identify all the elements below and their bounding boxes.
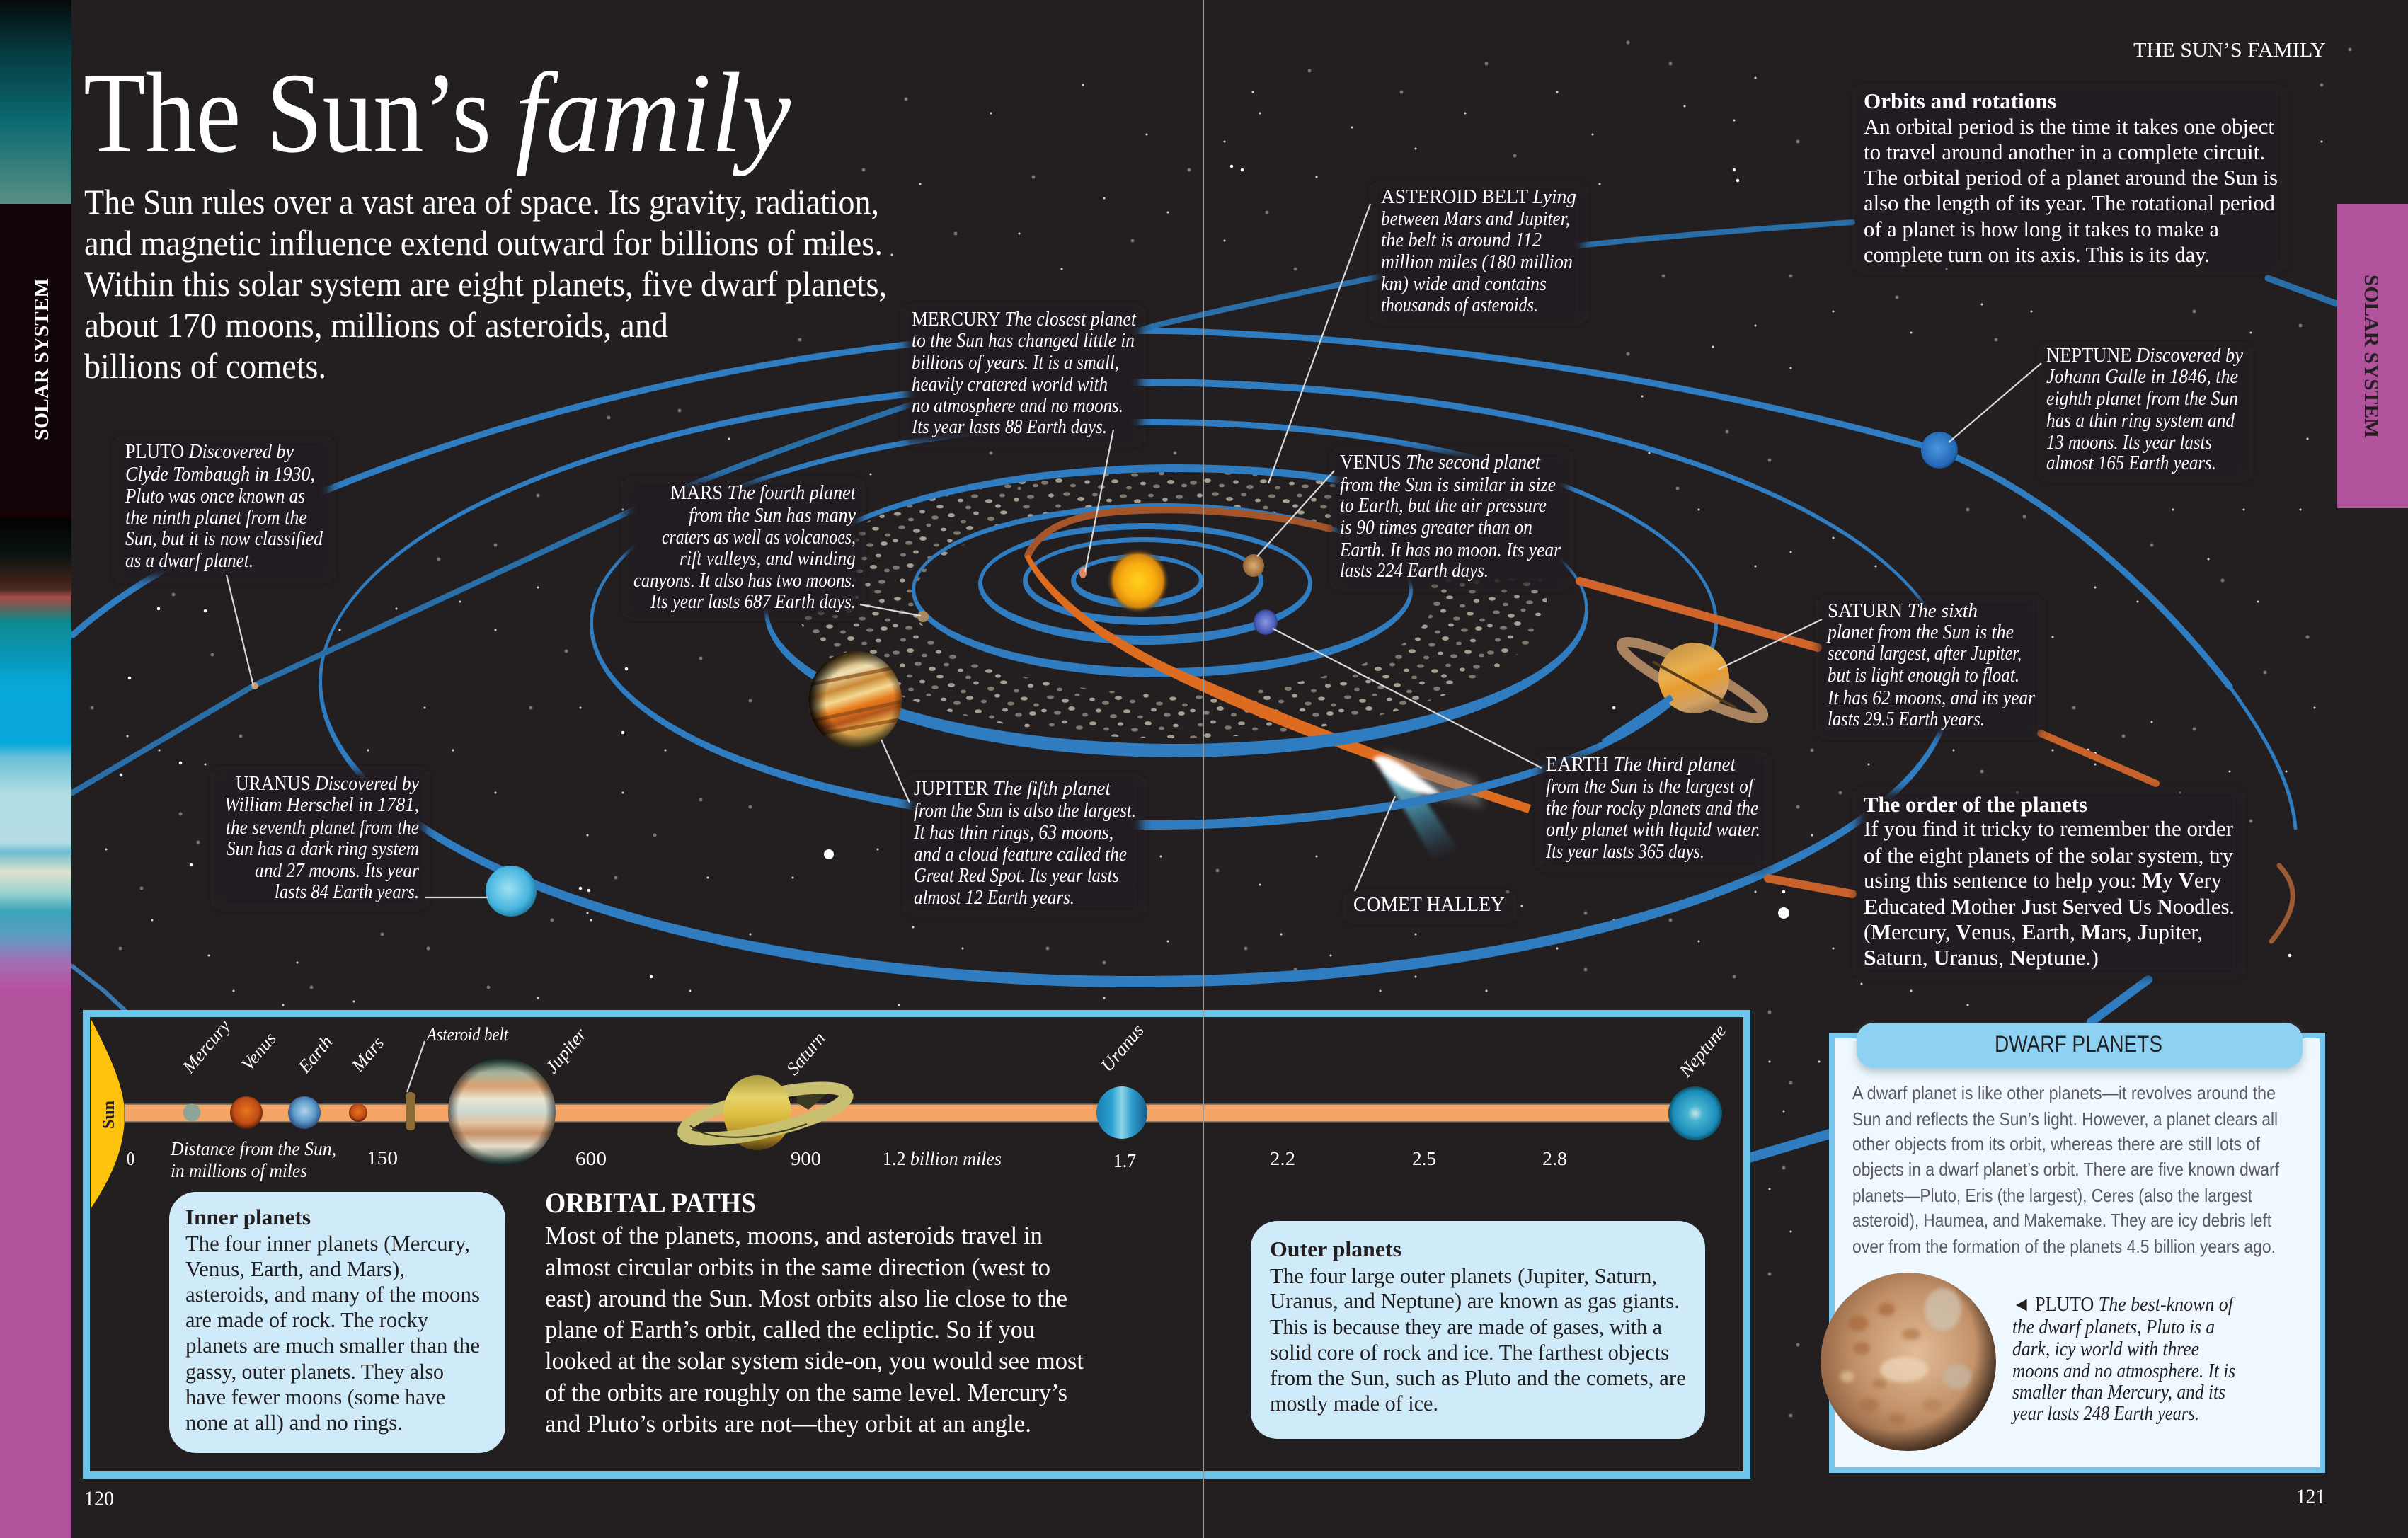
planet: Earth <box>1254 609 1278 635</box>
planet: Neptune <box>1921 432 1958 469</box>
label: Saturn: lasts 29.5 Earth years. <box>1828 708 1985 730</box>
scale: asteroid leader <box>407 1041 425 1092</box>
box: outer planets: from the Sun, such as Pluto and the comets, are <box>1270 1365 1686 1390</box>
label: Venus: VENUS The second planet <box>1340 452 1541 474</box>
label: Jupiter <box>913 778 1136 909</box>
text block: orbits and rotations: to travel around another in a complete circuit. <box>1864 139 2265 164</box>
text block: orbital paths: ORBITAL PATHS <box>545 1187 756 1219</box>
orbit: Pluto, tilted, orange and brown stretches <box>1025 510 1531 813</box>
label: Mercury: MERCURY The closest planet <box>912 309 1137 331</box>
label: Uranus: URANUS Discovered by <box>236 773 420 795</box>
scale: distance labels <box>127 1138 1567 1181</box>
intro text <box>84 182 887 386</box>
label: Earth: the four rocky planets and the <box>1546 798 1758 820</box>
text block: orbital paths: of the orbits are roughly on the same level. Mercury’s <box>545 1379 1067 1406</box>
label: Asteroid belt: the belt is around 112 <box>1381 229 1542 251</box>
label: Jupiter: JUPITER The fifth planet <box>914 778 1111 800</box>
text block: orbital paths: almost circular orbits in the same direction (west to <box>545 1253 1050 1281</box>
label: Saturn: It has 62 moons, and its year <box>1827 687 2035 709</box>
text block: orbital paths: east) around the Sun. Most orbits also lie close to the <box>545 1285 1067 1312</box>
label: Earth: from the Sun is the largest of <box>1546 776 1755 798</box>
label: Uranus: Sun has a dark ring system <box>227 838 419 860</box>
label: Venus: to Earth, but the air pressure <box>1340 495 1547 517</box>
text block: orbital paths: plane of Earth’s orbit, called the ecliptic. So if you <box>545 1316 1035 1343</box>
planet: Pluto large <box>1821 1273 1996 1451</box>
box: inner planets: are made of rock. The rocky <box>185 1307 428 1332</box>
Pluto caption: moons and no atmosphere. It is <box>2012 1360 2235 1382</box>
Pluto caption: smaller than Mercury, and its <box>2012 1382 2225 1404</box>
scale: distance bar <box>125 1104 1671 1122</box>
label: Saturn: but is light enough to float. <box>1828 665 2019 687</box>
label: Jupiter: almost 12 Earth years. <box>914 887 1074 909</box>
dwarf planets body text: Sun and reflects the Sun’s light. However, a planet clears all <box>1852 1108 2278 1130</box>
label: Mars: canyons. It also has two moons. <box>633 570 856 592</box>
intro text: Within this solar system are eight planets, five dwarf planets, <box>84 264 887 304</box>
scale: Saturn <box>680 1075 851 1150</box>
box: outer planets <box>1251 1221 1705 1439</box>
label: Pluto: Sun, but it is now classified <box>125 528 323 550</box>
planet: Mars <box>917 611 929 622</box>
box: inner planets: The four inner planets (Mercury, <box>185 1231 470 1256</box>
label: Saturn <box>1826 600 2035 730</box>
text block: orbital paths <box>545 1187 1084 1437</box>
scale: Mars <box>349 1103 367 1122</box>
scale: planet names: Earth <box>294 1032 337 1077</box>
title: The Sun’s <box>84 50 491 177</box>
box: outer planets: This is because they are made of gases, with a <box>1270 1314 1662 1339</box>
planet: Venus <box>1243 554 1264 577</box>
orbits: outer planets <box>319 379 1954 987</box>
scale: distance labels: 600 <box>575 1148 607 1169</box>
box: outer planets: solid core of rock and ice. The farthest objects <box>1270 1340 1669 1365</box>
text block: the order of the planets: The order of the planets <box>1864 792 2087 817</box>
orbit: Mercury <box>1071 554 1204 608</box>
Pluto caption: ◄ PLUTO The best-known of <box>2012 1294 2235 1316</box>
scale: distance labels: 1.7 <box>1113 1150 1136 1171</box>
scale: distance labels: 2.2 <box>1270 1148 1295 1169</box>
box: inner planets: Inner planets <box>185 1205 311 1229</box>
planet: Jupiter <box>808 651 902 749</box>
text block: orbits and rotations: complete turn on its axis. This is its day. <box>1864 242 2210 267</box>
scale: planet names <box>178 1016 1730 1081</box>
label: Mars: MARS The fourth planet <box>670 482 856 504</box>
label: Jupiter: Great Red Spot. Its year lasts <box>914 865 1119 887</box>
intro text: billions of comets. <box>84 346 326 386</box>
text block: orbits and rotations: An orbital period is the time it takes one object <box>1864 114 2274 139</box>
label: Neptune: NEPTUNE Discovered by <box>2046 345 2244 367</box>
text block: the order of the planets: Educated Mother Just Served Us Noodles. <box>1864 894 2235 919</box>
text block: orbits and rotations: of a planet is how long it takes to make a <box>1864 217 2219 241</box>
panel: distance scale and orbital paths <box>86 1014 1747 1475</box>
text block: the order of the planets: Saturn, Uranus, Neptune.) <box>1864 945 2099 970</box>
intro text: The Sun rules over a vast area of space. Its gravity, radiation, <box>84 182 879 222</box>
label: Neptune: eighth planet from the Sun <box>2046 388 2238 410</box>
left sidebar <box>0 0 71 1538</box>
dwarf planets body text: objects in a dwarf planet’s orbit. There are five known dwarf <box>1852 1159 2280 1180</box>
dwarf planets header pill <box>1857 1023 2303 1072</box>
orbit fragment in front of Saturn <box>1603 697 1672 742</box>
sidebar label: SOLAR SYSTEM <box>31 278 53 440</box>
orbit: Earth <box>978 523 1312 645</box>
planet: Mercury <box>1079 567 1087 578</box>
scale: asteroid belt <box>406 1092 415 1130</box>
label: Neptune: 13 moons. Its year lasts <box>2046 432 2212 454</box>
dwarf planets body text: asteroid), Haumea, and Makemake. They are icy debris left <box>1852 1210 2272 1231</box>
label: Mars: from the Sun has many <box>689 505 856 527</box>
label: Pluto: Clyde Tombaugh in 1930, <box>125 464 315 486</box>
label: Neptune <box>2046 345 2244 474</box>
scale: planet names: Jupiter <box>541 1023 591 1077</box>
scale: Sun <box>91 1018 125 1209</box>
text block: orbital paths: Most of the planets, moons, and asteroids travel in <box>545 1222 1043 1249</box>
box: outer planets: mostly made of ice. <box>1270 1391 1438 1416</box>
scale: Venus <box>230 1096 263 1129</box>
label: Neptune: almost 165 Earth years. <box>2046 452 2216 474</box>
scale: planet names: Venus <box>237 1028 280 1074</box>
Pluto caption: dark, icy world with three <box>2012 1338 2199 1360</box>
box: inner planets: Venus, Earth, and Mars), <box>185 1256 405 1281</box>
dwarf planets body text <box>1852 1082 2280 1257</box>
dwarf planets body text: over from the formation of the planets 4.5 billion years ago. <box>1852 1236 2276 1257</box>
label: Uranus: the seventh planet from the <box>226 817 419 839</box>
orbit: Saturn <box>590 419 1718 830</box>
label: Mercury: billions of years. It is a small, <box>912 352 1119 374</box>
label: Mars: Its year lasts 687 Earth days. <box>650 591 856 613</box>
scale: Sun: Sun <box>100 1101 118 1129</box>
label: Earth: only planet with liquid water. <box>1546 819 1760 841</box>
box: inner planets: planets are much smaller than the <box>185 1333 480 1358</box>
box: outer planets: Outer planets <box>1270 1236 1401 1261</box>
text block: orbits and rotations: Orbits and rotations <box>1864 88 2056 113</box>
label: Asteroid belt: km) wide and contains <box>1381 273 1547 295</box>
text block: the order of the planets: If you find it tricky to remember the order <box>1864 816 2234 841</box>
scale: distance labels: in millions of miles <box>171 1160 307 1181</box>
label: Asteroid belt: ASTEROID BELT Lying <box>1381 186 1576 208</box>
text backing patches <box>117 88 2283 975</box>
label: Uranus: William Herschel in 1781, <box>224 794 419 816</box>
label: Jupiter: from the Sun is also the largest. <box>914 800 1136 822</box>
label: Mercury: Its year lasts 88 Earth days. <box>911 416 1107 438</box>
box: outer planets: Uranus, and Neptune) are known as gas giants. <box>1270 1288 1680 1313</box>
text block: the order of the planets <box>1864 792 2235 970</box>
scale: planet names: Saturn <box>782 1028 830 1079</box>
dwarf planets header pill: DWARF PLANETS <box>1995 1031 2162 1057</box>
page number 121: 121 <box>2296 1485 2325 1508</box>
orbit: Jupiter <box>764 464 1588 757</box>
label: Pluto: Pluto was once known as <box>125 486 305 507</box>
planet: Sun <box>1107 549 1169 614</box>
orbits: inner planets <box>912 503 1413 677</box>
label: Mars <box>633 482 856 613</box>
label: Earth <box>1545 754 1760 863</box>
label: Mars: rift valleys, and winding <box>680 548 856 570</box>
label: Venus: from the Sun is similar in size <box>1340 474 1556 496</box>
label: Asteroid belt <box>1381 186 1576 316</box>
scale: distance labels: 2.5 <box>1412 1148 1436 1169</box>
scale: Earth <box>288 1096 321 1129</box>
box: inner planets <box>169 1192 505 1453</box>
label: Saturn: SATURN The sixth <box>1828 600 1978 622</box>
dwarf planets body text: other objects from its orbit, whereas there are still lots of <box>1852 1133 2261 1154</box>
label: Uranus: and 27 moons. Its year <box>255 860 419 882</box>
asteroid belt <box>796 465 1547 738</box>
label: Saturn: planet from the Sun is the <box>1826 621 2014 643</box>
title: family <box>515 50 791 177</box>
label: Uranus: lasts 84 Earth years. <box>275 881 419 903</box>
label: Earth: EARTH The third planet <box>1546 754 1736 776</box>
tab label: SOLAR SYSTEM <box>2360 275 2382 438</box>
label: Pluto <box>125 441 323 572</box>
label: Earth: Its year lasts 365 days. <box>1545 841 1704 863</box>
label: Pluto: as a dwarf planet. <box>125 550 253 572</box>
label: Uranus <box>224 773 420 903</box>
label: Comet Halley: COMET HALLEY <box>1353 894 1505 916</box>
label: Neptune: Johann Galle in 1846, the <box>2046 366 2238 388</box>
label: Mercury <box>911 309 1137 438</box>
label: Jupiter: and a cloud feature called the <box>914 844 1127 866</box>
label: Mercury: no atmosphere and no moons. <box>912 395 1123 417</box>
planet: Uranus <box>486 866 537 917</box>
scale: planet names: Neptune <box>1675 1021 1730 1081</box>
label: Neptune: has a thin ring system and <box>2046 410 2235 432</box>
scale: Mercury <box>183 1104 201 1121</box>
label: Venus: Earth. It has no moon. Its year <box>1339 539 1561 561</box>
scale: distance labels: 150 <box>367 1147 398 1169</box>
centre fold line <box>1203 0 1204 1538</box>
box: inner planets: gassy, outer planets. They also <box>185 1359 444 1384</box>
scale: planet names: Asteroid belt <box>425 1024 509 1045</box>
planet: Saturn <box>1615 631 1770 729</box>
orbit: Mars <box>912 503 1413 677</box>
box: inner planets: have fewer moons (some have <box>185 1384 445 1409</box>
label: Jupiter: It has thin rings, 63 moons, <box>913 822 1113 844</box>
scale: distance labels: 900 <box>791 1148 821 1169</box>
box: inner planets: asteroids, and many of the moons <box>185 1282 480 1307</box>
box: outer planets: The four large outer planets (Jupiter, Saturn, <box>1270 1263 1657 1288</box>
scale: Uranus <box>1096 1086 1147 1139</box>
dwarf planets body text: A dwarf planet is like other planets—it revolves around the <box>1852 1082 2276 1103</box>
leader lines <box>227 204 2041 897</box>
label: Mars: craters as well as volcanoes, <box>662 527 856 549</box>
text block: orbits and rotations: also the length of its year. The rotational period <box>1864 190 2275 215</box>
panel: dwarf planets <box>1821 1023 2322 1470</box>
label: Pluto: the ninth planet from the <box>125 507 307 529</box>
text block: the order of the planets: of the eight planets of the solar system, try <box>1864 843 2233 868</box>
text block: the order of the planets: using this sentence to help you: My Very <box>1864 868 2222 893</box>
intro text: about 170 moons, millions of asteroids, and <box>84 305 668 345</box>
title <box>84 50 791 177</box>
label: Venus: is 90 times greater than on <box>1340 517 1532 539</box>
dwarf planets body text: planets—Pluto, Eris (the largest), Ceres (also the largest <box>1852 1185 2253 1206</box>
scale: Neptune <box>1668 1086 1722 1140</box>
page number 120: 120 <box>84 1487 114 1510</box>
label: Mercury: to the Sun has changed little in <box>912 330 1135 352</box>
label: Asteroid belt: million miles (180 million <box>1381 251 1573 273</box>
scale: distance labels: 1.2 billion miles <box>883 1148 1002 1169</box>
orbit: Uranus <box>319 379 1954 987</box>
scale: distance labels: 0 <box>127 1148 134 1169</box>
running head: THE SUN’S FAMILY <box>2133 39 2326 62</box>
text block: orbital paths: and Pluto’s orbits are not—they orbit at an angle. <box>545 1410 1031 1437</box>
Pluto caption: the dwarf planets, Pluto is a <box>2012 1316 2215 1338</box>
scale: Jupiter <box>448 1058 556 1166</box>
scale: distance labels: Distance from the Sun, <box>170 1138 336 1159</box>
Pluto caption <box>2010 1294 2235 1425</box>
label: Mercury: heavily cratered world with <box>912 374 1108 396</box>
scale: planet names: Mercury <box>178 1016 234 1078</box>
text block: orbital paths: looked at the solar system side-on, you would see most <box>545 1347 1084 1375</box>
intro text: and magnetic influence extend outward for billions of miles. <box>84 223 883 263</box>
label: Venus <box>1339 452 1561 582</box>
label: Pluto: PLUTO Discovered by <box>125 441 294 463</box>
right tab <box>2337 204 2408 508</box>
planet: Pluto <box>251 682 258 689</box>
orbit: Pluto, orange fragments <box>1580 581 2293 941</box>
text block: orbits and rotations: The orbital period of a planet around the Sun is <box>1864 165 2278 190</box>
scale: planet names: Uranus <box>1096 1020 1148 1076</box>
orbit: Neptune <box>72 331 2295 1158</box>
label: Venus: lasts 224 Earth days. <box>1340 560 1489 582</box>
label: Asteroid belt: thousands of asteroids. <box>1381 294 1538 316</box>
label: Saturn: second largest, after Jupiter, <box>1828 643 2022 665</box>
box: inner planets: none at all) and no rings. <box>185 1410 403 1435</box>
label: Asteroid belt: between Mars and Jupiter, <box>1381 208 1570 230</box>
text block: orbits and rotations <box>1864 88 2278 267</box>
orbit: Pluto, blue stretches <box>72 222 2337 793</box>
orbit: Venus <box>1023 537 1263 625</box>
Pluto caption: year lasts 248 Earth years. <box>2010 1403 2199 1425</box>
scale: planet names: Mars <box>347 1033 388 1077</box>
comet Halley <box>1373 750 1483 872</box>
scale: distance labels: 2.8 <box>1542 1148 1567 1169</box>
text block: the order of the planets: (Mercury, Venus, Earth, Mars, Jupiter, <box>1864 919 2203 944</box>
scene planets <box>251 432 1958 917</box>
